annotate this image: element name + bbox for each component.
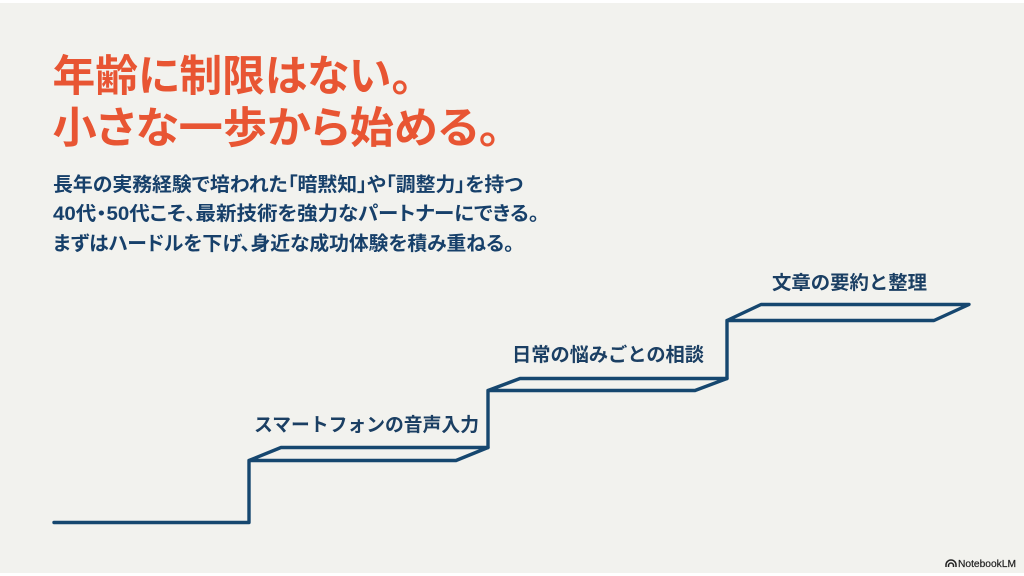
staircase chart bbox=[54, 304, 969, 522]
step 3 riser and tread bbox=[727, 304, 969, 378]
NotebookLM logo: NotebookLM bbox=[958, 558, 1016, 570]
title: 年齢に制限はない。 bbox=[52, 53, 412, 101]
step label: daily consultation: 日常の悩みごとの相談 bbox=[512, 343, 704, 366]
body text: 長年の実務経験で培われた「暗黙知」や「調整力」を持つ bbox=[53, 173, 523, 196]
body text bbox=[53, 173, 539, 255]
body text: まずはハードルを下げ、身近な成功体験を積み重ねる。 bbox=[53, 232, 514, 255]
step 2 riser and tread bbox=[488, 378, 727, 448]
icon: NotebookLM mark bbox=[946, 560, 956, 567]
title bbox=[52, 53, 500, 153]
title: 小さな一歩から始める。 bbox=[52, 105, 500, 153]
step 1 riser and tread bbox=[54, 448, 488, 522]
body text: 40代・50代こそ、最新技術を強力なパートナーにできる。 bbox=[53, 202, 539, 225]
step label: summarising text: 文章の要約と整理 bbox=[772, 272, 927, 294]
step label: smartphone voice input: スマートフォンの音声入力 bbox=[254, 414, 479, 436]
